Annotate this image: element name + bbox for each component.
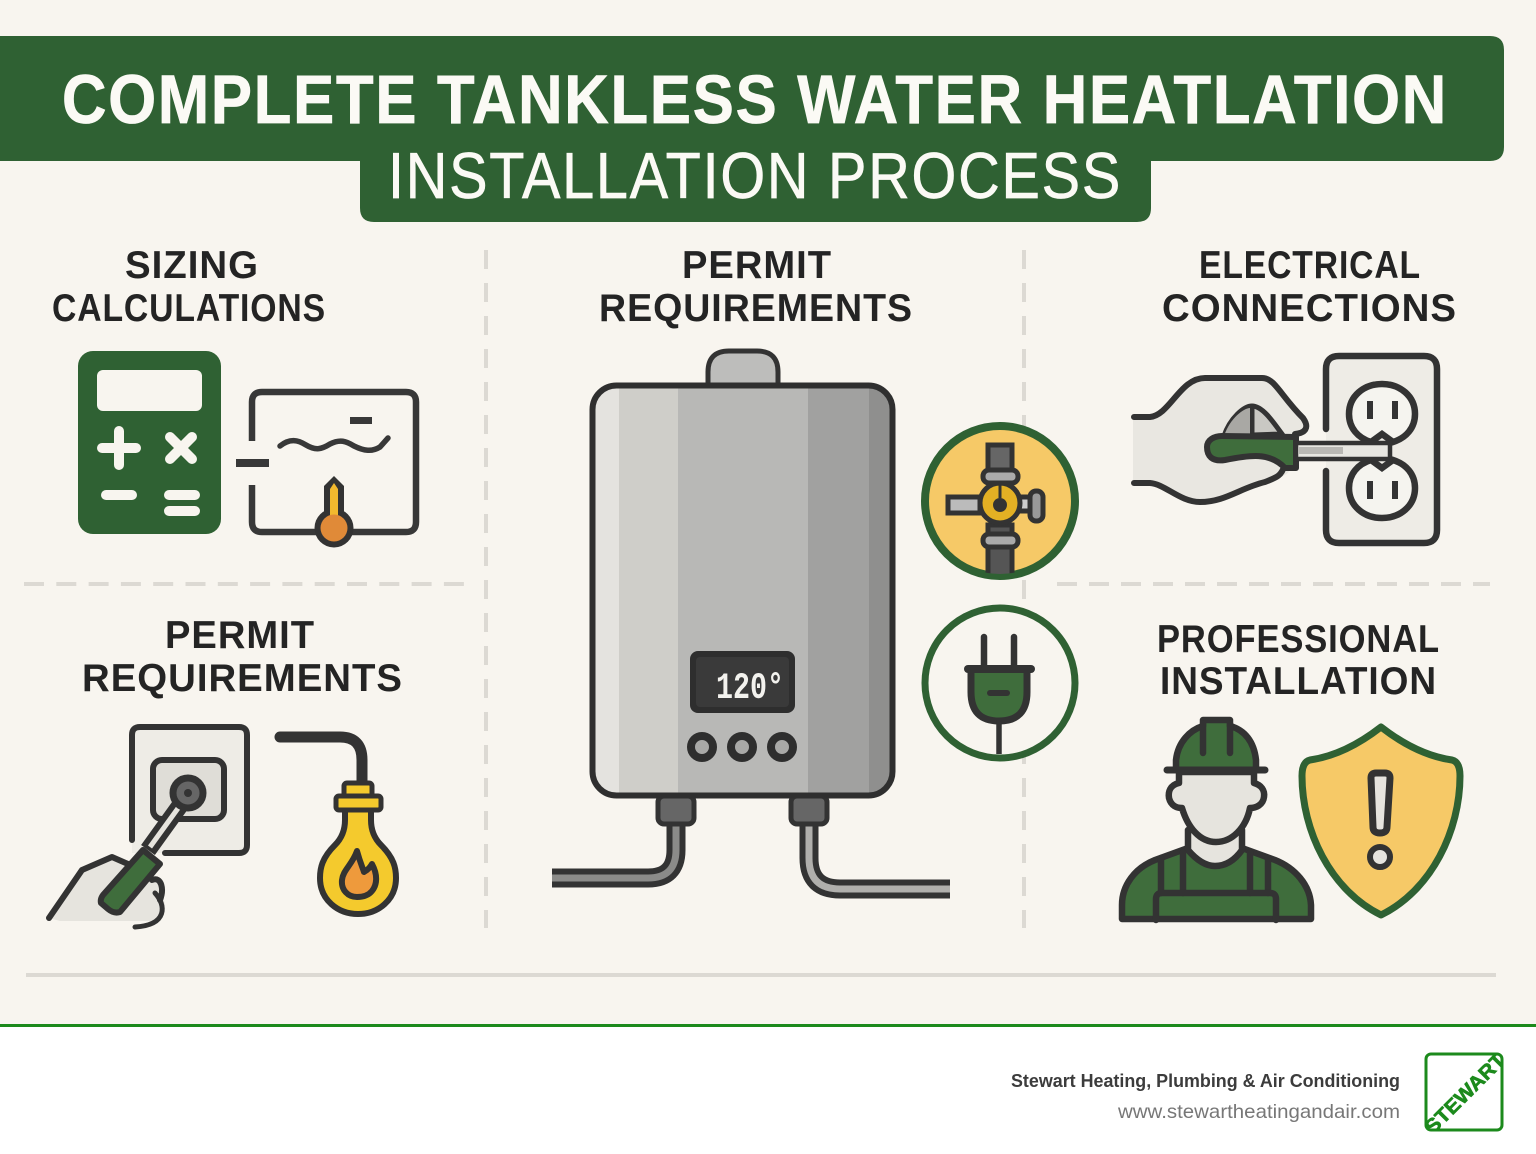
icon: calculator: [78, 351, 221, 534]
heading: permit requirements: [82, 614, 403, 700]
icon: safety shield with exclamation: [1302, 727, 1460, 915]
heading: electrical connections: CONNECTIONS: [1162, 287, 1457, 330]
heading: centre permit requirements: [599, 244, 913, 330]
panel: sizing calculations: [52, 244, 416, 548]
heading: sizing calculations: SIZING: [125, 244, 259, 287]
temperature display: 120°: [716, 668, 784, 710]
footer: [0, 1024, 1536, 1154]
icon: worker with hard hat: [1122, 720, 1311, 920]
panel: electrical connections: [1133, 244, 1457, 543]
illustration: tankless water heater: [552, 351, 950, 889]
heading: electrical connections: [1162, 244, 1457, 330]
heading: permit requirements: REQUIREMENTS: [82, 657, 403, 700]
panel: professional installation: [1122, 618, 1460, 920]
icon: wall outlet: [1326, 356, 1437, 543]
website: www.stewartheatingandair.com: [1117, 1101, 1400, 1123]
icon: water temperature diagram: [236, 392, 416, 548]
heading: centre permit requirements: PERMIT: [682, 244, 832, 287]
heading: sizing calculations: CALCULATIONS: [52, 287, 326, 330]
icon: gas line with flame bulb: [280, 737, 396, 914]
subtitle: INSTALLATION PROCESS: [388, 139, 1122, 212]
logo: STEWART: [1421, 1049, 1510, 1139]
icon: electric plug: [925, 608, 1075, 758]
control buttons: [691, 736, 793, 758]
icon: hand with screwdriver: [1133, 378, 1390, 502]
panel: permit requirements (centre): [552, 244, 1075, 889]
heading: centre permit requirements: REQUIREMENTS: [599, 287, 913, 330]
title banner: [0, 36, 1504, 222]
heading: professional installation: [1157, 618, 1440, 703]
heading: sizing calculations: [52, 244, 326, 330]
icon: gas outlet with wrench: [49, 727, 247, 927]
icon: gas valve: [925, 426, 1075, 585]
heading: professional installation: PROFESSIONAL: [1157, 618, 1440, 661]
company name: Stewart Heating, Plumbing & Air Conditioning: [1011, 1070, 1400, 1091]
heading: permit requirements: PERMIT: [165, 614, 315, 657]
heading: professional installation: INSTALLATION: [1160, 660, 1437, 703]
heading: electrical connections: ELECTRICAL: [1199, 244, 1421, 287]
panel: permit requirements (left): [49, 614, 403, 927]
temperature display: [690, 651, 795, 713]
